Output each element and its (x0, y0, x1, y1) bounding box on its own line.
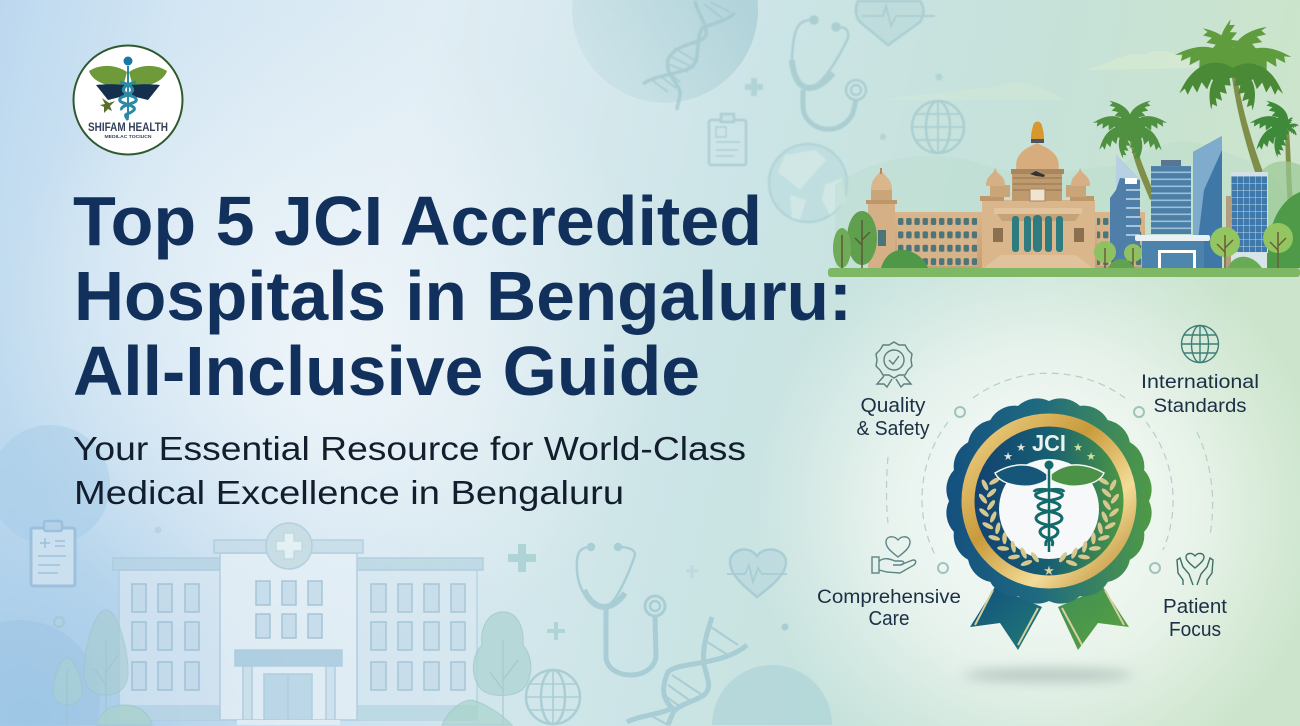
icon: stethoscope top (792, 16, 866, 129)
columns and dark windows (1012, 215, 1063, 252)
icon: globe bottom (526, 670, 580, 724)
JCI badge (946, 398, 1152, 650)
badge stars: ★ (1003, 451, 1013, 463)
icon: plus large (508, 544, 536, 572)
scalloped seal (946, 398, 1152, 604)
ribbon left (970, 587, 1042, 650)
green bushes right (1258, 161, 1300, 268)
feature: patient focus (1163, 553, 1227, 641)
badge wings (995, 465, 1104, 486)
entrance (235, 650, 342, 725)
Vidhana Soudha building (866, 122, 1145, 268)
palm tree right (1249, 95, 1300, 205)
glass towers (1110, 136, 1268, 268)
dashed connector arcs (886, 373, 1213, 555)
faint medical icons, bottom (31, 521, 788, 725)
label: Standards (1154, 396, 1246, 417)
decorative background circles (0, 0, 832, 725)
label: International (1141, 372, 1259, 393)
skyline illustration (828, 18, 1300, 277)
faint clouds and hills behind skyline (835, 51, 1300, 270)
shadow under badge (963, 668, 1133, 682)
badge stars (1003, 442, 1096, 578)
icon: heart in hand (872, 537, 916, 573)
palm tree small (1092, 95, 1168, 200)
logo wings (89, 66, 167, 100)
icon: plus small (547, 622, 565, 640)
logo plane (100, 98, 115, 113)
laurel wreath right (1058, 476, 1120, 567)
label: & Safety (856, 418, 930, 440)
icon: dna bottom (627, 617, 747, 725)
faint medical icons, top (643, 1, 964, 222)
badge stars: ★ (1016, 442, 1026, 454)
subtitle: Medical Excellence in Bengaluru (74, 474, 624, 511)
icon: globe with continents (769, 144, 847, 222)
label: Quality (860, 395, 926, 417)
label: Patient (1163, 596, 1227, 618)
subtitle (73, 430, 746, 511)
gold ring (968, 420, 1130, 582)
label (1163, 596, 1227, 641)
icon: clipboard top (709, 114, 746, 165)
icon: plus top (745, 78, 763, 96)
badge stars: ★ (1073, 442, 1083, 454)
icon: rosette (876, 342, 912, 387)
icon: hands with heart (1177, 553, 1213, 585)
left wing (113, 558, 221, 720)
laurel wreath left (978, 476, 1040, 567)
ground strip (828, 268, 1300, 277)
title: All-Inclusive Guide (73, 332, 700, 410)
logo (74, 46, 182, 154)
title (73, 182, 852, 410)
icon: heart shield top (856, 1, 935, 45)
right wing (357, 558, 483, 720)
label: Comprehensive (817, 587, 961, 608)
badge wordmark: JCI (1032, 430, 1066, 456)
subtitle: Your Essential Resource for World-Class (73, 430, 746, 467)
icon: clipboard (31, 521, 75, 586)
icon: globe (1182, 326, 1218, 362)
connector dots (938, 407, 1160, 573)
hospital windows (132, 581, 465, 690)
badge stars: ★ (1086, 451, 1096, 463)
white disc (999, 459, 1099, 559)
title: Top 5 JCI Accredited (73, 182, 762, 260)
feature: comprehensive care (817, 537, 961, 630)
label (1141, 372, 1259, 417)
logo caduceus (120, 56, 136, 120)
logo tagline: MEDILAC TOCIUCN (104, 134, 152, 139)
faint hospital illustration (113, 523, 483, 725)
wings (893, 212, 985, 268)
logo name: SHIFAM HEALTH (88, 122, 168, 134)
icon: dna top (643, 1, 735, 110)
title: Hospitals in Bengaluru: (74, 257, 852, 335)
icon: globe outline top (912, 101, 964, 153)
icon: heart pulse (727, 549, 787, 597)
skyline trees (833, 211, 1293, 268)
icon: stethoscope (577, 544, 665, 675)
label (817, 587, 961, 630)
faint trees and bushes (53, 610, 531, 725)
center block (980, 122, 1095, 268)
badge caduceus (1034, 460, 1064, 552)
left tower (866, 168, 897, 268)
feature: international standards (1141, 326, 1259, 417)
badge stars: ★ (1043, 563, 1055, 578)
feature: quality and safety (856, 342, 930, 440)
palm tree large (1173, 18, 1293, 175)
label (856, 395, 930, 440)
ribbon right (1058, 587, 1129, 650)
label: Focus (1169, 619, 1221, 641)
center block (214, 523, 363, 720)
label: Care (868, 608, 910, 630)
